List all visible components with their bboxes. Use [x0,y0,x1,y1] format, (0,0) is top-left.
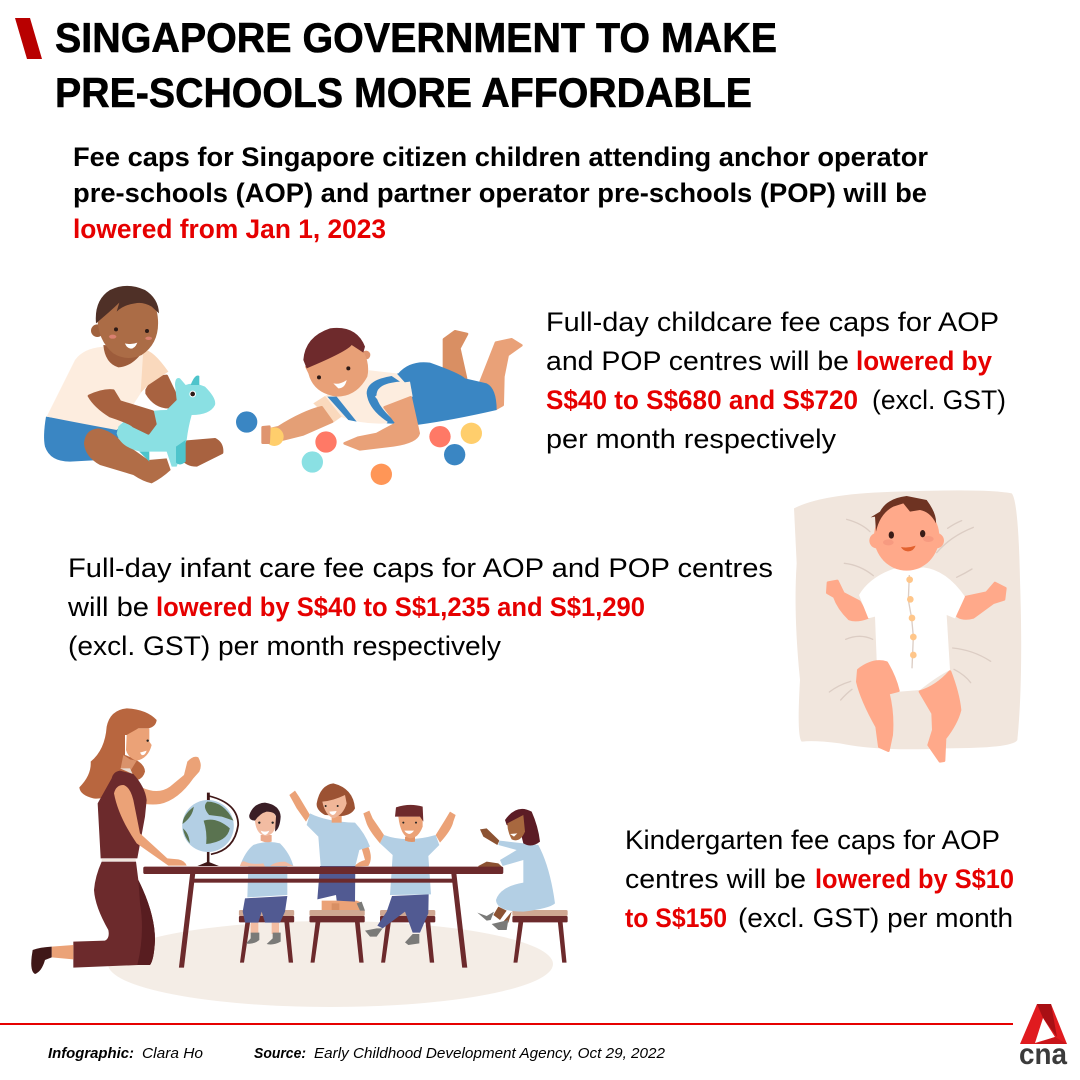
baby onesie [859,567,965,692]
left child far leg and arm [147,376,222,465]
left child arm [89,390,155,433]
right child shirt [313,370,412,424]
right child overalls [367,362,497,425]
text: childcare fee caps: per month respectively [546,424,837,454]
title: PRE-SCHOOLS MORE AFFORDABLE [55,69,752,116]
left child shirt [47,347,145,430]
footer credits: Early Childhood Development Agency, Oct 29, 2022 [314,1046,665,1062]
text: kindergarten fee caps [625,825,1014,933]
left child shorts [44,417,120,462]
blanket creases [829,519,991,700]
text: childcare fee caps [546,307,1006,454]
illustration: teacher and children at a table [31,708,568,1007]
onesie placket and buttons [908,575,913,668]
intro text block: Fee caps for Singapore citizen children attending anchor operator [73,142,928,172]
footer credits: Infographic: [48,1046,134,1062]
title [55,14,777,116]
text: childcare fee caps: Full-day childcare fee caps for AOP [546,307,999,337]
right child head [362,351,370,359]
left child head [103,345,145,367]
child 3 [363,805,456,945]
blanket [794,490,1021,749]
text: kindergarten fee caps: Kindergarten fee caps for AOP [625,825,1000,855]
text: childcare fee caps: S$40 to S$680 and S$720 [546,385,858,415]
baby arms [827,581,868,620]
left child leg [84,428,171,483]
icon: red title slash [15,18,42,59]
baby legs [920,672,960,761]
text: infant care fee caps: will be [67,592,149,622]
teacher [31,708,201,974]
floor ellipse [108,921,553,1007]
text: kindergarten fee caps: (excl. GST) per month [738,903,1013,933]
CNA logo [1019,1004,1067,1071]
intro text block: pre-schools (AOP) and partner operator pre-schools (POP) will be [73,178,927,208]
intro text block: lowered from Jan 1, 2023 [73,214,386,244]
four children [240,783,555,945]
globe [182,793,238,866]
footer credits: Clara Ho [142,1046,203,1062]
text: kindergarten fee caps: lowered by S$10 [815,864,1014,894]
CNA logo: cna [1019,1038,1067,1071]
text: kindergarten fee caps: centres will be [625,864,806,894]
stools [239,910,568,963]
footer credits [48,1046,665,1062]
toy dinosaur [117,378,215,467]
illustration: two children playing with toys [44,286,521,485]
footer rule [0,1023,1013,1025]
intro text block [73,142,928,244]
table [143,867,503,968]
coloured balls [236,411,482,485]
baby head [869,533,885,548]
text: infant care fee caps: lowered by S$40 to S$1,235 and S$1,290 [156,592,645,622]
illustration: baby lying on a blanket [794,490,1021,761]
right child arms [263,407,332,443]
footer credits: Source: [254,1046,306,1062]
title: SINGAPORE GOVERNMENT TO MAKE [55,14,777,61]
child 4 [477,809,555,930]
child 2 [289,783,371,911]
text: infant care fee caps: (excl. GST) per month respectively [68,631,502,661]
child 1 [240,803,293,944]
text: infant care fee caps: Full-day infant care fee caps for AOP and POP centres [68,553,773,583]
text: childcare fee caps: lowered by [856,346,992,376]
text: childcare fee caps: (excl. GST) [872,385,1006,415]
text: infant care fee caps [67,553,773,661]
text: kindergarten fee caps: to S$150 [625,903,727,933]
right child back leg [444,331,467,378]
text: childcare fee caps: and POP centres will be [546,346,849,376]
